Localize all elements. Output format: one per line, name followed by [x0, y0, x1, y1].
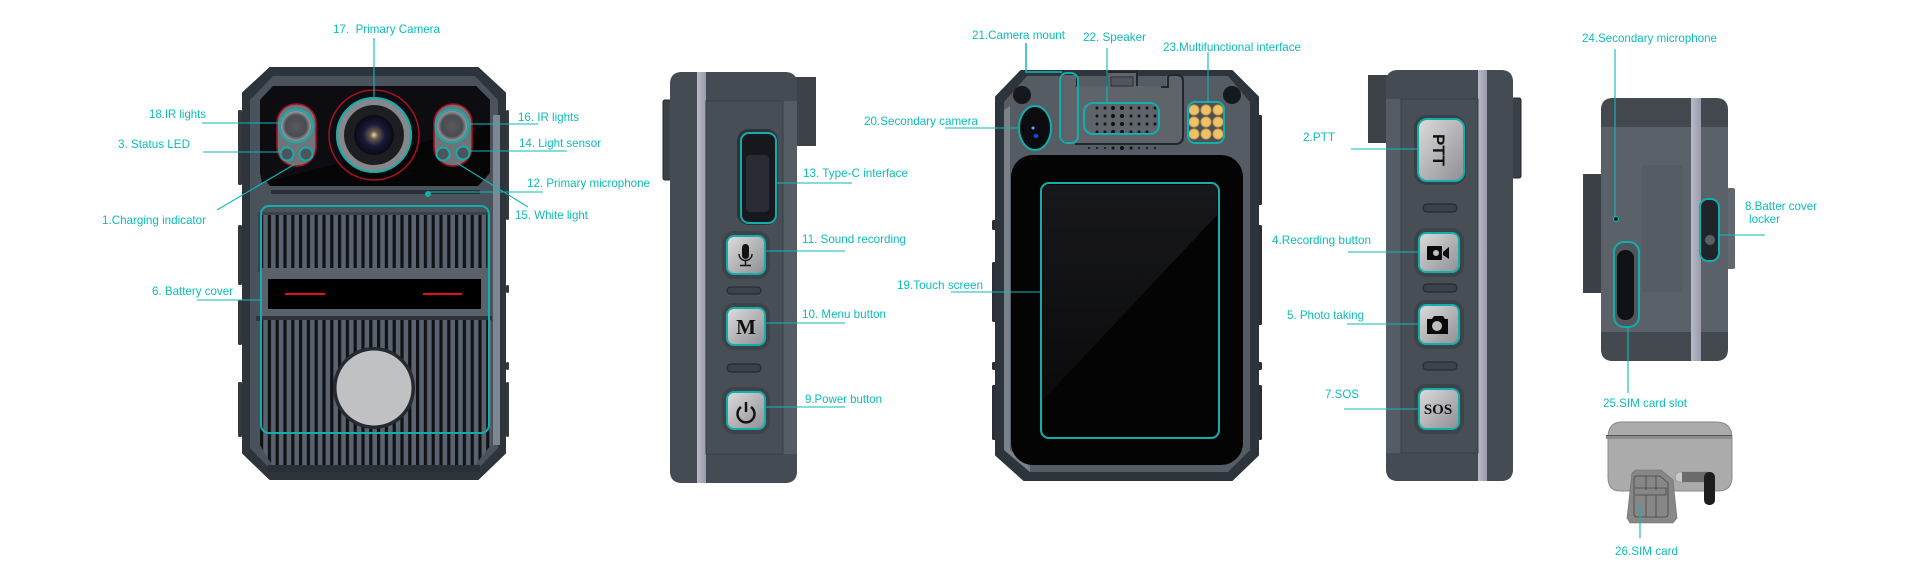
sound recording button — [722, 231, 770, 279]
battery cover locker — [1700, 199, 1719, 261]
illustration: SIM card insertion — [1606, 422, 1732, 523]
slot — [1423, 284, 1457, 292]
label: 8 battery cover locker: locker — [1749, 212, 1780, 226]
label: 8 battery cover locker — [1719, 199, 1817, 235]
label: 19 touch screen: 19.Touch screen — [897, 278, 983, 292]
label: 1 charging indicator: 1.Charging indicator — [102, 213, 206, 227]
side housing — [663, 72, 816, 483]
device: bottom edge view — [1583, 98, 1735, 361]
device: right side view — [1368, 70, 1521, 481]
label: 5 photo taking: 5. Photo taking — [1287, 308, 1364, 322]
label: 7 SOS: 7.SOS — [1325, 387, 1359, 401]
label: 7 SOS — [1325, 387, 1419, 409]
PTT button — [1414, 115, 1466, 185]
label: 6 battery cover: 6. Battery cover — [152, 284, 233, 298]
side housing — [1368, 70, 1521, 481]
SIM cover body — [1606, 422, 1732, 491]
label: 2 PTT — [1303, 130, 1418, 149]
secondary mic dot — [1614, 216, 1618, 222]
label: 9 power button: 9.Power button — [805, 392, 882, 406]
label: 3 status LED: 3. Status LED — [118, 137, 190, 151]
label: 26 SIM card — [1615, 505, 1678, 558]
SOS button — [1414, 384, 1464, 434]
SOS button: SOS — [1424, 402, 1452, 418]
label: 23 multifunctional interface: 23.Multifunctional interface — [1163, 40, 1301, 54]
left IR light cluster — [277, 104, 316, 166]
label: 18 IR lights: 18.IR lights — [149, 107, 206, 121]
pogo-pin interface — [1188, 102, 1224, 143]
right IR light cluster — [434, 104, 472, 166]
label: 13 type-C interface: 13. Type-C interface — [803, 166, 908, 180]
screen — [1011, 155, 1243, 465]
camera mount plate — [1060, 72, 1183, 144]
label: 17 primary camera: 17. Primary Camera — [333, 22, 440, 36]
label: 12 primary microphone: 12. Primary microphone — [527, 176, 650, 190]
photo button — [1414, 300, 1464, 349]
label: 17 primary camera — [333, 22, 440, 97]
slot — [1423, 204, 1457, 212]
label: 22 speaker: 22. Speaker — [1083, 30, 1146, 44]
device: left side view — [663, 72, 816, 483]
label: 21 camera mount — [972, 28, 1066, 72]
menu button: M — [736, 315, 756, 339]
label: 22 speaker — [1083, 30, 1146, 103]
label: 8 battery cover locker: 8.Batter cover — [1745, 199, 1817, 213]
label: 5 photo taking — [1287, 308, 1419, 324]
label: 10 menu button: 10. Menu button — [802, 307, 886, 321]
label: 24 secondary microphone: 24.Secondary microphone — [1582, 31, 1717, 45]
back housing — [992, 71, 1262, 480]
label: 20 secondary camera: 20.Secondary camera — [864, 114, 978, 128]
label: 15 white light: 15. White light — [515, 208, 589, 222]
label: 16 IR lights: 16. IR lights — [518, 110, 579, 124]
label: 10 menu button — [766, 307, 886, 323]
SIM card slot — [1614, 242, 1639, 327]
label: 25 SIM card slot: 25.SIM card slot — [1603, 396, 1688, 410]
label: 4 recording button: 4.Recording button — [1272, 233, 1371, 247]
SIM slot and tab — [1675, 472, 1715, 505]
label: 2 PTT: 2.PTT — [1303, 130, 1336, 144]
label: 11 sound recording — [766, 232, 906, 251]
type-C port — [737, 129, 778, 225]
label: 6 battery cover — [152, 284, 262, 300]
mount holes — [1013, 86, 1241, 104]
label: 16 IR lights — [468, 110, 579, 124]
secondary camera — [1019, 106, 1051, 150]
device: back view — [992, 71, 1262, 480]
label: 26 SIM card: 26.SIM card — [1615, 544, 1678, 558]
label: 23 multifunctional interface — [1163, 40, 1301, 102]
SIM card — [1627, 470, 1677, 523]
label: 15 white light — [457, 163, 589, 222]
device: front view — [238, 68, 509, 479]
slot — [727, 364, 761, 372]
label: 14 light sensor: 14. Light sensor — [519, 136, 601, 150]
slot — [1423, 362, 1457, 370]
label: 9 power button — [766, 392, 882, 407]
label: 11 sound recording: 11. Sound recording — [802, 232, 906, 246]
PTT button: PTT — [1429, 134, 1448, 167]
recording button — [1414, 228, 1464, 277]
edge housing — [1583, 98, 1735, 361]
power button — [722, 387, 770, 434]
speaker grille — [1084, 103, 1159, 150]
microphone strip — [271, 190, 480, 197]
primary camera lens — [329, 90, 419, 180]
label: 21 camera mount: 21.Camera mount — [972, 28, 1066, 42]
menu button — [722, 303, 770, 350]
label: 1 charging indicator — [102, 164, 295, 227]
front housing — [238, 68, 509, 479]
camera window — [260, 86, 490, 186]
label: 14 light sensor — [470, 136, 601, 151]
label: 18 IR lights — [149, 107, 281, 123]
label: 25 SIM card slot — [1603, 327, 1688, 410]
battery cover — [256, 206, 492, 472]
label: 13 type-C interface — [776, 166, 908, 183]
slot — [727, 287, 761, 294]
